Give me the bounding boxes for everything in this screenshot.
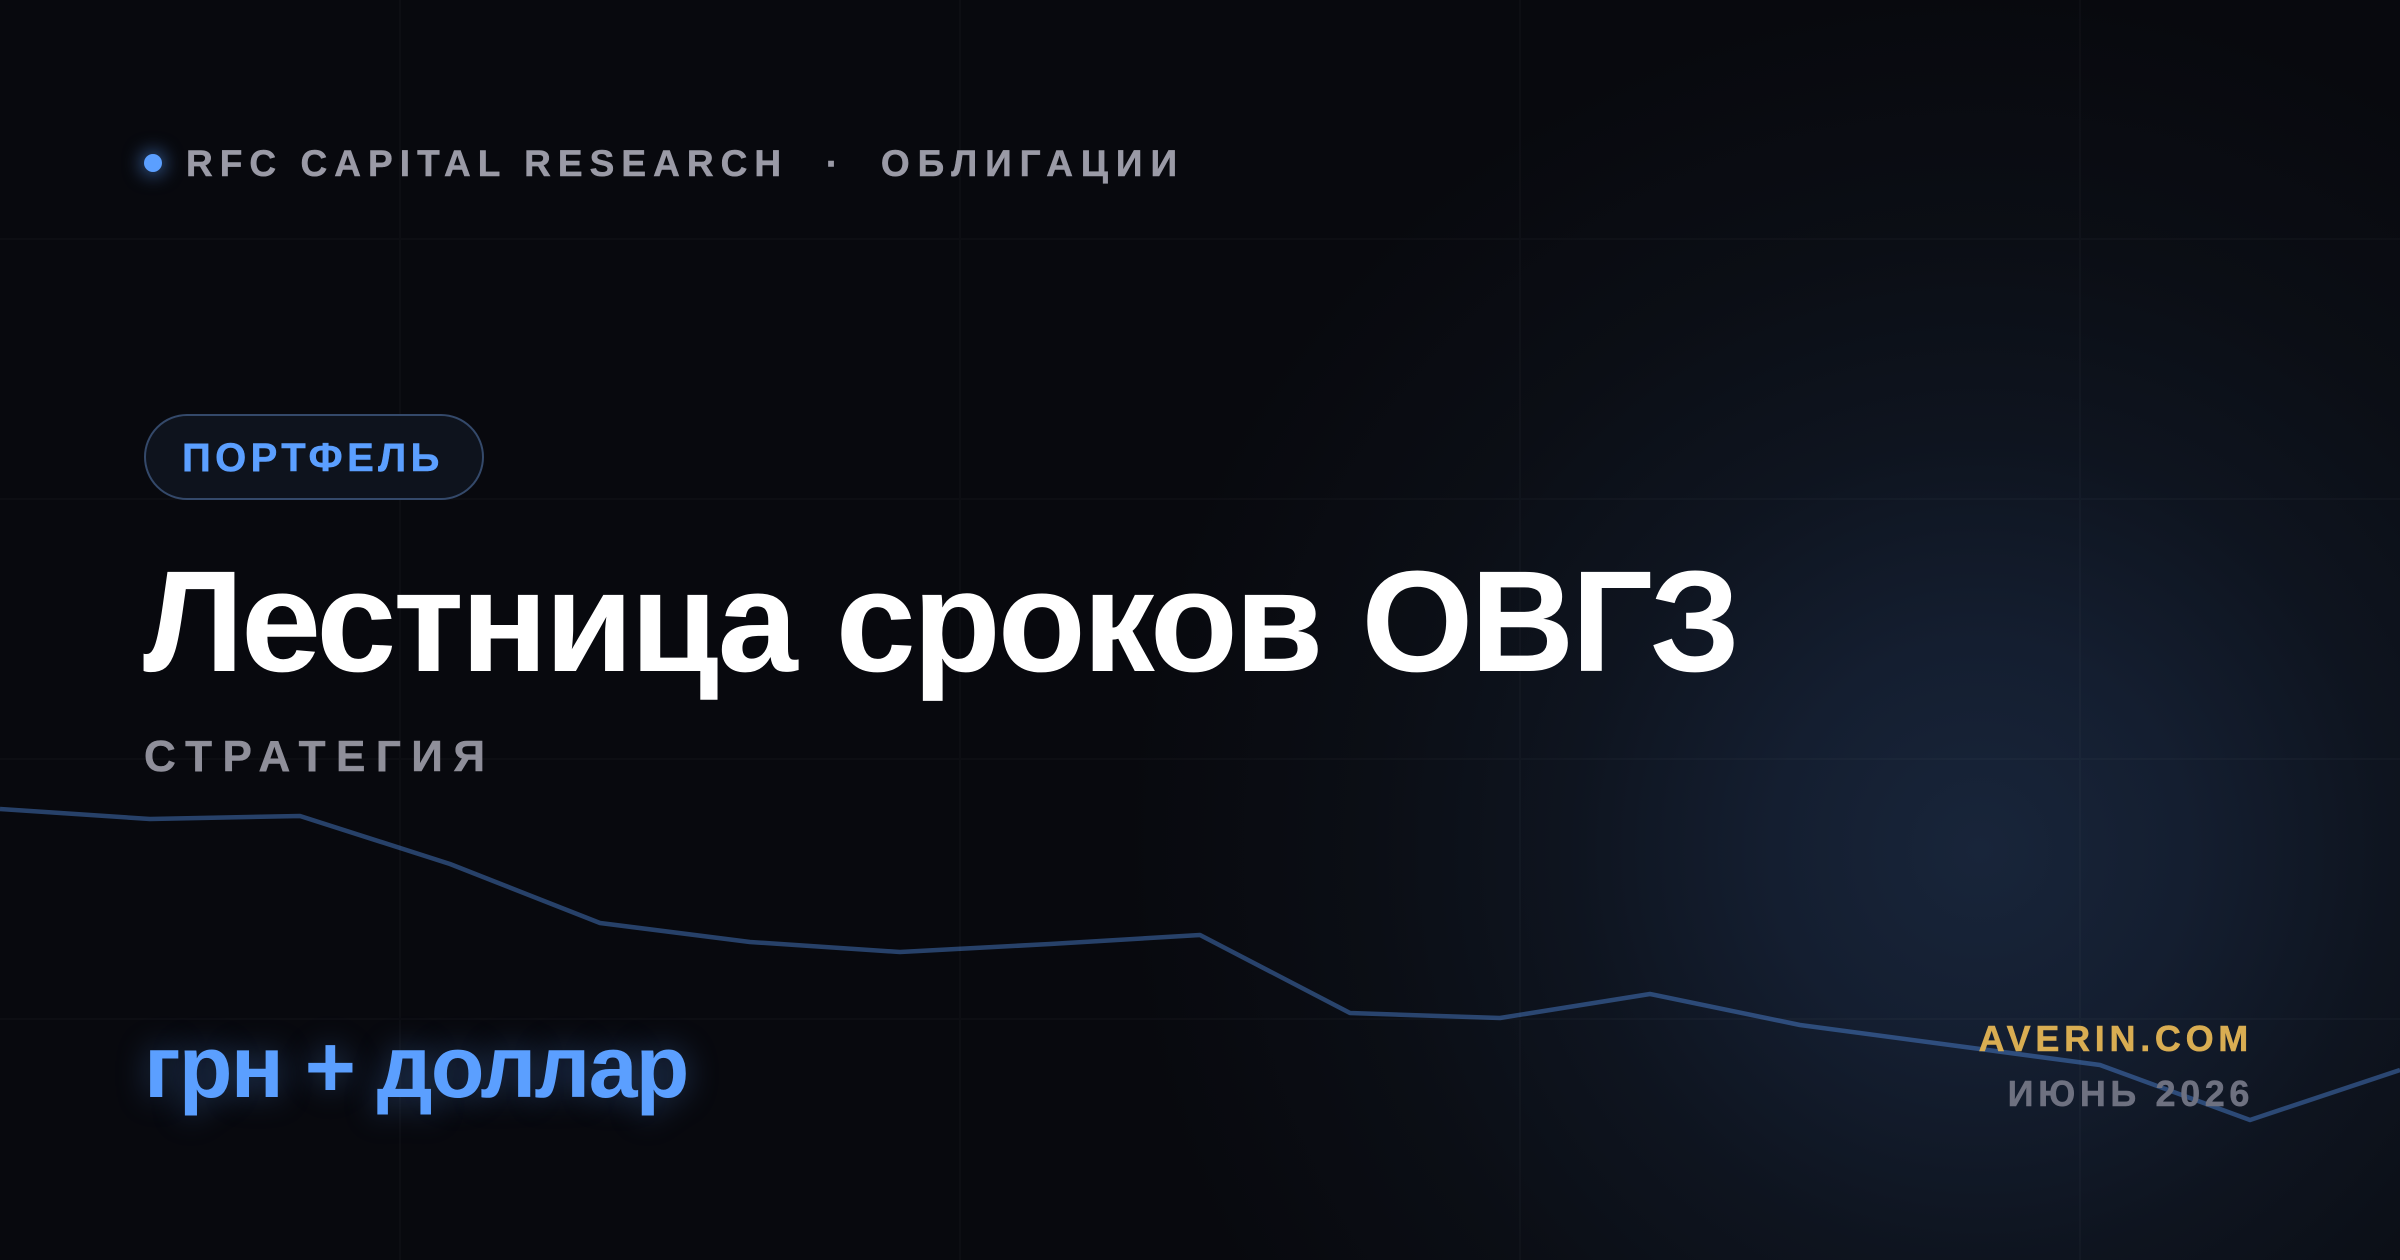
header text: RFC CAPITAL RESEARCH · ОБЛИГАЦИИ xyxy=(186,143,1185,184)
header label xyxy=(130,140,1185,186)
currency tagline: грн + доллар xyxy=(144,1017,688,1116)
title: Лестница сроков ОВГЗ xyxy=(143,541,1737,702)
icon: status dot xyxy=(144,154,162,172)
date: ИЮНЬ 2026 xyxy=(2008,1073,2254,1114)
pill label: ПОРТФЕЛЬ xyxy=(182,436,444,480)
subtitle: СТРАТЕГИЯ xyxy=(144,732,496,781)
site name: AVERIN.COM xyxy=(1979,1018,2253,1059)
category pill xyxy=(144,414,484,500)
